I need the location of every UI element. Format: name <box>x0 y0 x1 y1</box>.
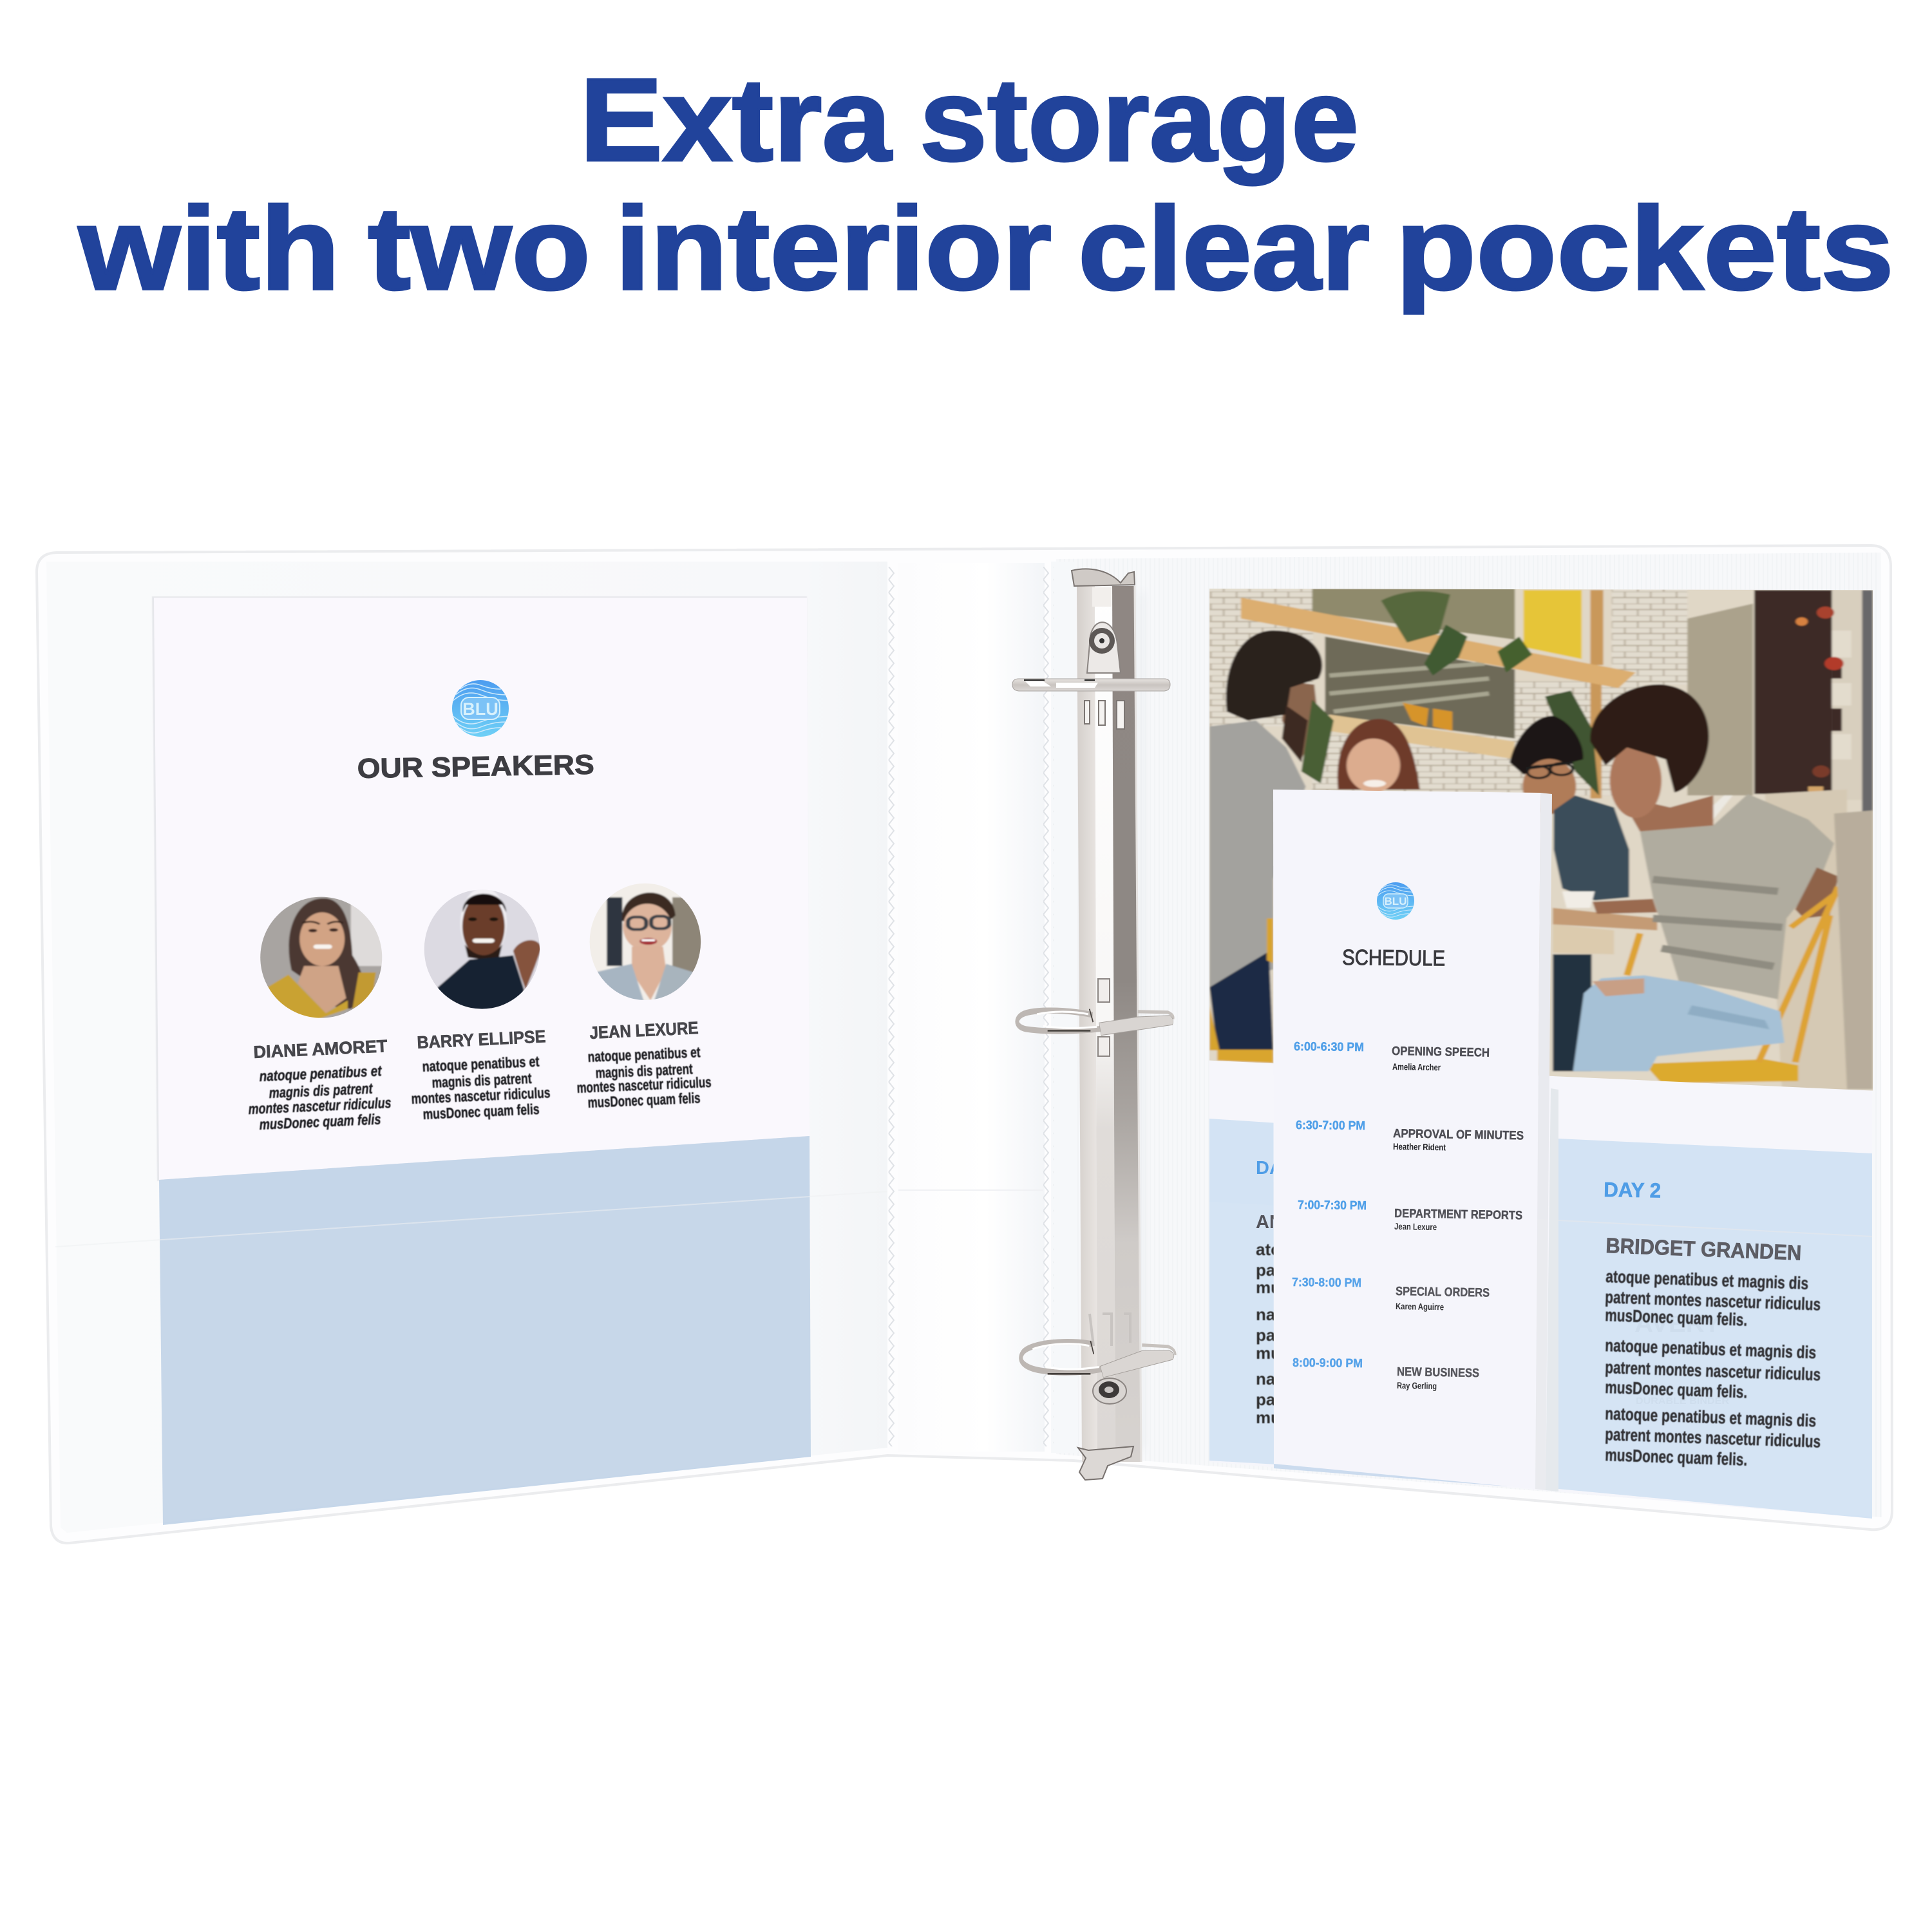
left man <box>1209 721 1305 990</box>
schedule row 2: Heather Rident <box>1393 1141 1446 1152</box>
title: clear <box>1078 182 1370 314</box>
speaker: Barry Ellipse: BARRY ELLIPSE <box>417 1027 546 1052</box>
speakers sheet <box>154 598 810 1180</box>
schedule row 3: Jean Lexure <box>1394 1221 1437 1232</box>
speaker: Jean Lexure <box>576 1018 712 1111</box>
schedule row 1: 6:00-6:30 PM <box>1294 1040 1364 1054</box>
heading: schedule: SCHEDULE <box>1342 945 1445 971</box>
speaker: Diane Amoret: magnis dis patrent <box>269 1080 374 1101</box>
title <box>78 53 1894 314</box>
schedule row 2 <box>1296 1119 1524 1152</box>
title: Extra <box>580 53 892 185</box>
day 1 panel (behind schedule card): pat <box>1256 1390 1281 1409</box>
panel: schedule card <box>1273 790 1558 1492</box>
middle woman <box>1338 719 1420 790</box>
day 2 label: DAY 2 <box>1604 1178 1661 1202</box>
day 2 body text: musDonec quam felis. <box>1605 1445 1748 1470</box>
icon: BLU logo <box>452 680 509 737</box>
heading: our speakers: OUR SPEAKERS <box>357 750 594 784</box>
ring 1 <box>1012 679 1170 691</box>
speaker: Diane Amoret: musDonec quam felis <box>259 1110 381 1133</box>
day 1 panel (behind schedule card): DA <box>1256 1158 1283 1179</box>
title: two <box>368 182 591 314</box>
speaker: Barry Ellipse: montes nascetur ridiculus <box>411 1084 551 1107</box>
top bracket <box>1072 569 1135 586</box>
title: interior <box>615 182 1052 314</box>
day 2 body text: musDonec quam felis. <box>1605 1305 1748 1330</box>
day 2 body text: patrent montes nascetur ridiculus <box>1605 1425 1821 1452</box>
schedule row 5: NEW BUSINESS <box>1397 1365 1479 1380</box>
watermark on pocket: AVERY <box>1634 1311 1721 1337</box>
speaker: Diane Amoret: montes nascetur ridiculus <box>248 1094 392 1117</box>
screw top <box>1087 622 1121 673</box>
day 1 panel (behind schedule card): pat <box>1256 1260 1281 1280</box>
schedule row 3: DEPARTMENT REPORTS <box>1394 1207 1522 1222</box>
panel: right pocket flyer <box>1204 585 1880 1519</box>
day 2 body text: patrent montes nascetur ridiculus <box>1605 1287 1821 1314</box>
title: with <box>78 182 340 314</box>
schedule row 2: 6:30-7:00 PM <box>1296 1119 1365 1133</box>
day 1 panel (behind schedule card) <box>1209 1119 1288 1465</box>
watermark on pocket <box>1634 1311 1729 1406</box>
day 1 panel (behind schedule card): ato <box>1256 1240 1281 1259</box>
portrait: Diane Amoret <box>257 895 385 1019</box>
schedule row 1 <box>1294 1040 1490 1072</box>
flyer paper <box>1209 589 1872 1519</box>
ring 2 <box>1017 1009 1173 1036</box>
speaker: Barry Ellipse <box>411 1027 551 1122</box>
speaker: Diane Amoret <box>248 1036 392 1133</box>
speaker: Diane Amoret: natoque penatibus et <box>259 1062 383 1084</box>
schedule row 5 <box>1293 1356 1479 1391</box>
day 2 body text: natoque penatibus et magnis dis <box>1605 1404 1817 1430</box>
day 2 panel <box>1558 1139 1872 1519</box>
speaker: Jean Lexure: montes nascetur ridiculus <box>576 1074 712 1096</box>
day 2 body text: natoque penatibus et magnis dis <box>1605 1336 1817 1362</box>
ring 3 <box>1021 1341 1175 1378</box>
binder body <box>37 545 1892 1543</box>
icon: BLU logo: BLU <box>462 699 498 719</box>
speaker: Jean Lexure: natoque penatibus et <box>587 1043 701 1065</box>
schedule row 4 <box>1292 1276 1490 1312</box>
day 1 panel (behind schedule card): mu <box>1256 1343 1281 1363</box>
speaker: Jean Lexure: musDonec quam felis <box>587 1089 701 1111</box>
schedule row 3 <box>1298 1198 1522 1232</box>
right woman <box>1640 794 1834 999</box>
day 2 body text <box>1605 1267 1821 1470</box>
schedule row 5: Ray Gerling <box>1397 1380 1437 1391</box>
hat man <box>1510 716 1583 775</box>
day 1 panel (behind schedule card): nat <box>1256 1369 1281 1388</box>
schedule row 2: APPROVAL OF MINUTES <box>1393 1127 1524 1143</box>
schedule row 3: 7:00-7:30 PM <box>1298 1198 1367 1213</box>
photo: cafe group <box>1204 585 1880 1095</box>
speaker: Barry Ellipse: musDonec quam felis <box>422 1101 540 1122</box>
metal rail <box>1077 586 1141 1462</box>
day 2 body text: patrent montes nascetur ridiculus <box>1605 1358 1821 1385</box>
speaker: Jean Lexure: magnis dis patrent <box>595 1060 693 1081</box>
speaker: Jean Lexure: JEAN LEXURE <box>589 1018 699 1043</box>
icon: BLU logo small: BLU <box>1385 895 1406 907</box>
blue lower section <box>159 1136 811 1525</box>
day 2 body text: atoque penatibus et magnis dis <box>1605 1267 1809 1293</box>
speaker: Diane Amoret: DIANE AMORET <box>253 1036 388 1062</box>
speaker: Barry Ellipse: magnis dis patrent <box>431 1070 532 1091</box>
day 1 panel (behind schedule card): mu <box>1256 1278 1281 1297</box>
chair <box>1644 1059 1798 1083</box>
portrait: Barry Ellipse <box>422 887 541 1011</box>
speaker: Barry Ellipse: natoque penatibus et <box>422 1053 540 1075</box>
schedule row 4: Karen Aguirre <box>1396 1301 1444 1312</box>
day 1 panel (behind schedule card): mu <box>1256 1408 1281 1427</box>
card face <box>1273 790 1540 1489</box>
schedule row 4: SPECIAL ORDERS <box>1396 1285 1490 1300</box>
schedule row 1: OPENING SPEECH <box>1392 1045 1490 1060</box>
right clear pocket <box>1056 1194 1882 1517</box>
schedule row 4: 7:30-8:00 PM <box>1292 1276 1361 1290</box>
schedule row 5: 8:00-9:00 PM <box>1293 1356 1363 1370</box>
portrait: Jean Lexure <box>588 882 704 1003</box>
screw bottom <box>1093 1378 1126 1404</box>
left clear pocket <box>55 1190 1043 1533</box>
day 1 panel (behind schedule card): AN <box>1256 1212 1283 1233</box>
speaker name: BRIDGET GRANDEN <box>1605 1233 1802 1265</box>
table <box>1553 908 1657 931</box>
day 1 panel (behind schedule card): pat <box>1256 1325 1281 1345</box>
title: pockets <box>1396 182 1894 314</box>
schedule row 1: Amelia Archer <box>1392 1061 1441 1072</box>
watermark on pocket: DURABLE BINDER <box>1636 1396 1729 1406</box>
day 1 panel (behind schedule card): nat <box>1256 1305 1281 1324</box>
icon: BLU logo small <box>1377 882 1414 920</box>
panel: left pocket sheet <box>152 596 811 1525</box>
ring mechanism <box>1012 569 1175 1480</box>
jeans <box>1573 975 1785 1071</box>
bottom bracket <box>1078 1446 1133 1480</box>
day 2 body text: musDonec quam felis. <box>1605 1378 1748 1402</box>
title: storage <box>920 53 1359 185</box>
